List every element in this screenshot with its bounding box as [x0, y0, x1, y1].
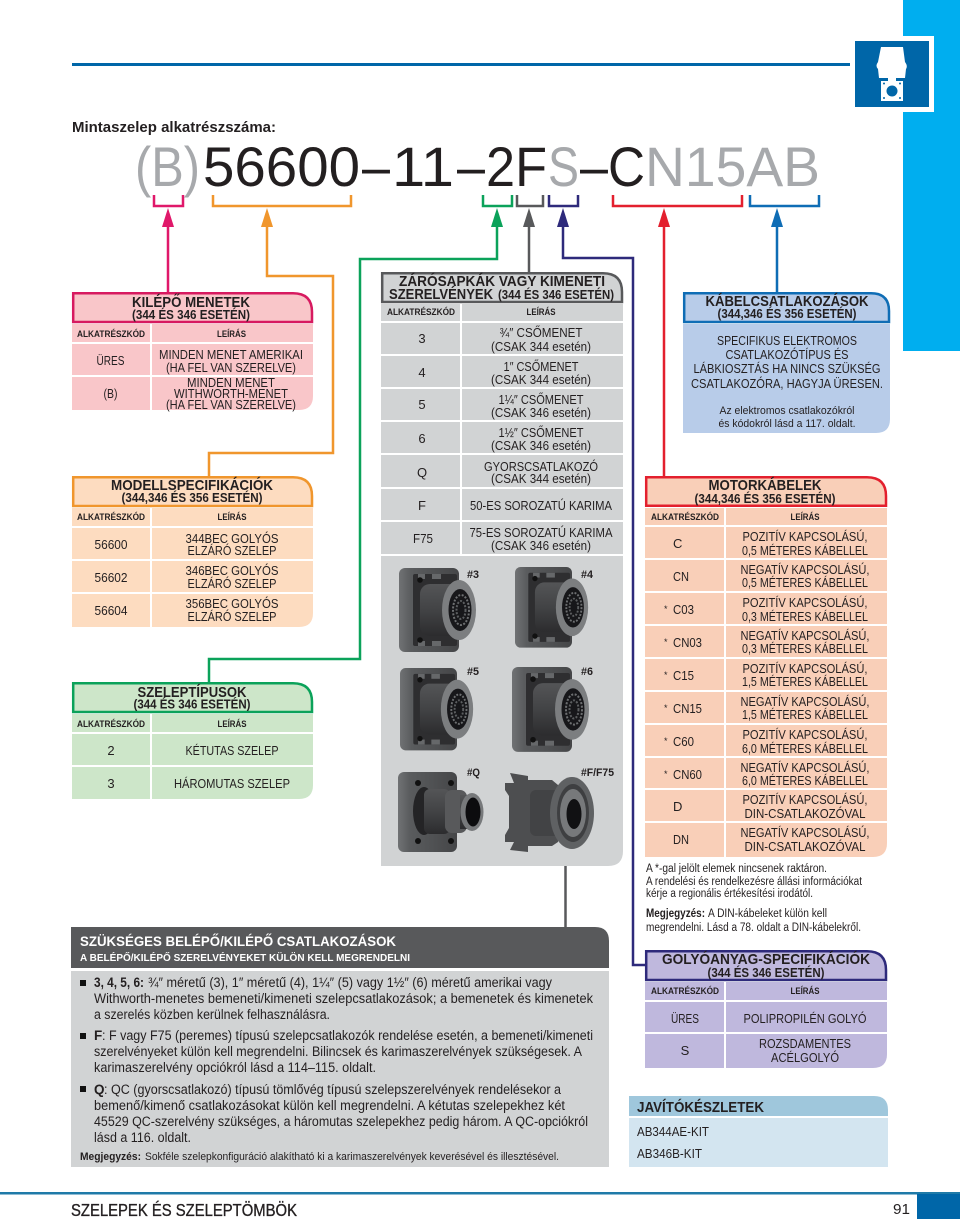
bullet: F: karimaszerelvény opciókról lásd a 114–115. oldalt. — [94, 1060, 376, 1075]
row: 2 — [72, 734, 313, 765]
connector: blue — [750, 195, 819, 292]
row: 56604: 56604 — [94, 603, 128, 618]
row: 56600: 56600 — [94, 537, 128, 552]
part number: (B) — [135, 135, 200, 198]
heading: SZELEPTÍPUSOK — [138, 684, 247, 701]
panel: model specifications — [72, 476, 313, 627]
row: CN60: 6,0 MÉTERES KÁBELLEL — [742, 773, 868, 788]
row: CN60: NEGATÍV KAPCSOLÁSÚ, — [740, 760, 870, 775]
row: F75: (CSAK 346 esetén) — [491, 538, 591, 553]
row: CN03: * — [664, 637, 668, 647]
part number: – — [457, 135, 486, 198]
row: CN15: NEGATÍV KAPCSOLÁSÚ, — [740, 694, 870, 709]
fitting #5 — [400, 666, 479, 750]
footnote: stock note: A *-gal jelölt elemek nincsenek raktáron. — [646, 863, 827, 875]
description text: SPECIFIKUS ELEKTROMOS — [717, 333, 857, 348]
row: 56604 — [72, 594, 313, 627]
row: CN15: CN15 — [673, 701, 702, 716]
panel: end caps and outlet fittings — [381, 272, 623, 866]
footer page block — [917, 1194, 960, 1219]
page number: 91 — [893, 1201, 910, 1218]
row: 56600 — [72, 528, 313, 559]
footer rule — [0, 1192, 960, 1194]
bullet: 3, 4, 5, 6: a szerelés közben kerülnek felhasználásra. — [94, 1007, 330, 1022]
panel: valve types — [72, 683, 313, 799]
panel: outlet threads — [72, 293, 313, 412]
heading: (344,346 ÉS 356 ESETÉN) — [718, 306, 856, 321]
row: C60: POZITÍV KAPCSOLÁSÚ, — [742, 727, 868, 742]
column headers: ALKATRÉSZKÓD — [77, 328, 145, 339]
row: 2: 2 — [107, 743, 115, 758]
row: 3: (CSAK 344 esetén) — [491, 339, 591, 354]
bullet: Q: Q — [94, 1082, 105, 1097]
row: 56602: ELZÁRÓ SZELEP — [188, 576, 276, 591]
column headers: LEÍRÁS — [526, 307, 556, 317]
row: 5: (CSAK 346 esetén) — [491, 405, 591, 420]
row: C60: C60 — [673, 734, 694, 749]
row: ÜRES: MINDEN MENET AMERIKAI — [159, 347, 303, 362]
description text: és kódokról lásd a 117. oldalt. — [718, 418, 856, 430]
heading — [629, 1096, 888, 1116]
column headers: ALKATRÉSZKÓD — [77, 511, 145, 522]
row: 6: 1½″ CSŐMENET — [498, 425, 584, 440]
panel: ball material specifications — [645, 950, 887, 1068]
row: D — [645, 790, 887, 821]
heading: MODELLSPECIFIKÁCIÓK — [111, 476, 273, 494]
row: (B) — [72, 375, 313, 412]
row: C03: POZITÍV KAPCSOLÁSÚ, — [742, 595, 868, 610]
heading — [73, 476, 312, 506]
description text: CSATLAKOZÓTÍPUS ÉS — [726, 347, 849, 362]
row: ÜRES: ÜRES — [96, 353, 125, 368]
bullet: Q: bemenő/kimenő csatlakozásokat külön kell megrendelni. A kétutas szelepekhez két — [94, 1098, 565, 1113]
bullet: Q: 45529 QC-szerelvény szükséges, a háromutas szelepekhez pedig három. A QC-opciókról — [94, 1114, 588, 1129]
row: Q: (CSAK 344 esetén) — [491, 471, 591, 486]
row: C03: 0,3 MÉTERES KÁBELLEL — [742, 609, 868, 624]
heading — [73, 683, 312, 712]
row: C60: 6,0 MÉTERES KÁBELLEL — [742, 741, 868, 756]
footnote: stock note: kérje a regionális értékesítési irodától. — [646, 888, 813, 900]
row: DN: NEGATÍV KAPCSOLÁSÚ, — [740, 825, 870, 840]
description text — [683, 324, 890, 433]
heading — [73, 293, 312, 322]
fitting #F/F75: #F/F75 — [581, 767, 614, 779]
fitting #6: #6 — [581, 666, 593, 678]
part number: – — [362, 135, 391, 198]
connector: red — [613, 195, 742, 476]
bullet: Q: : QC (gyorscsatlakozó) típusú tömlővég típusú szelepszerelvények rendelésekor a — [104, 1082, 561, 1097]
kit list: AB344AE-KIT — [637, 1124, 709, 1139]
connector: purple — [549, 195, 647, 965]
heading: GOLYÓANYAG-SPECIFIKÁCIÓK — [662, 950, 870, 968]
column headers: ALKATRÉSZKÓD — [77, 718, 145, 729]
row: 4: 1″ CSŐMENET — [504, 359, 579, 374]
footnote: DIN cable note: Megjegyzés: — [646, 908, 705, 920]
row: Q — [381, 455, 623, 487]
fitting #3 — [399, 568, 479, 652]
row: F75 — [381, 522, 623, 554]
row: CN03: 0,3 MÉTERES KÁBELLEL — [742, 641, 868, 656]
row: CN03 — [645, 626, 887, 657]
heading: KILÉPŐ MENETEK — [132, 293, 250, 311]
row: 3 — [381, 323, 623, 354]
row: CN: NEGATÍV KAPCSOLÁSÚ, — [740, 562, 870, 577]
row: 6: (CSAK 346 esetén) — [491, 438, 591, 453]
row: CN15 — [645, 692, 887, 723]
heading: SZERELVÉNYEK — [389, 286, 493, 303]
row: ÜRES — [72, 344, 313, 375]
heading: A BELÉPŐ/KILÉPŐ SZERELVÉNYEKET KÜLÖN KELL MEGRENDELNI — [80, 951, 410, 964]
row: C15: POZITÍV KAPCSOLÁSÚ, — [742, 661, 868, 676]
row: 3: HÁROMUTAS SZELEP — [174, 776, 290, 791]
heading — [646, 950, 886, 980]
row: CN03: NEGATÍV KAPCSOLÁSÚ, — [740, 628, 870, 643]
bullet: 3, 4, 5, 6: ¾″ méretű (3), 1″ méretű (4), 1¼″ (5) vagy 1½″ (6) méretű amerikai vagy — [148, 975, 552, 990]
connector: pink — [154, 195, 183, 292]
bullet: F: : F vagy F75 (peremes) típusú szelepcsatlakozók rendelése esetén, a bemeneti/kimeneti — [102, 1028, 593, 1043]
row: S: ACÉLGOLYÓ — [771, 1050, 839, 1065]
row: F: 50-ES SOROZATÚ KARIMA — [470, 498, 612, 513]
row: D: D — [673, 799, 682, 814]
fitting #F/F75 — [505, 767, 614, 852]
heading: (344 ÉS 346 ESETÉN) — [134, 696, 250, 712]
row: 56602: 56602 — [94, 570, 128, 585]
row: CN60 — [645, 758, 887, 788]
kit list: AB346B-KIT — [637, 1146, 702, 1161]
bullet: F: szerelvényeket külön kell megrendelni. Bilincsek és karimaszerelvények szükségesek. A — [94, 1044, 582, 1059]
row: 56602: 346BEC GOLYÓS — [186, 563, 279, 578]
column headers: LEÍRÁS — [218, 719, 246, 729]
row: C15: C15 — [673, 668, 694, 683]
row: 4: 4 — [418, 365, 426, 380]
column headers — [72, 508, 313, 526]
part number: N15AB — [645, 135, 820, 198]
note: Sokféle szelepkonfiguráció alakítható ki a karimaszerelvények keverésével és illesztésével. — [145, 1151, 559, 1163]
row: S: S — [681, 1043, 690, 1058]
panel: cable connections — [683, 293, 890, 433]
row: D: POZITÍV KAPCSOLÁSÚ, — [742, 792, 868, 807]
row: C60: * — [664, 736, 668, 746]
part number: 2F — [486, 135, 547, 198]
row: 3: 3 — [418, 331, 426, 346]
bullet: 3, 4, 5, 6: Withworth-menetes bemeneti/kimeneti szelepcsatlakozások; a bemenetek és kimenetek — [94, 991, 593, 1006]
row: C03: * — [664, 604, 668, 614]
row: CN15: * — [664, 703, 668, 713]
footnote: stock note: A rendelési és rendelkezésre állási információkat — [646, 876, 863, 888]
panel: motor cables — [645, 477, 887, 857]
heading — [646, 477, 886, 506]
row: (B): (HA FEL VAN SZERELVE) — [166, 397, 296, 412]
row: 56600: 344BEC GOLYÓS — [186, 531, 279, 546]
heading: (344 ÉS 346 ESETÉN) — [498, 287, 614, 302]
row: C03: C03 — [673, 602, 694, 617]
row: DN: DN — [673, 832, 689, 847]
row: C60 — [645, 725, 887, 756]
heading: MOTORKÁBELEK — [708, 477, 822, 494]
heading: (344,346 ÉS 356 ESETÉN) — [694, 491, 836, 506]
column headers — [645, 508, 887, 525]
heading: KÁBELCSATLAKOZÁSOK — [706, 293, 869, 310]
panel: repair kits — [629, 1096, 888, 1167]
footnote: DIN cable note: megrendelni. Lásd a 78. oldalt a DIN-kábelekről. — [646, 922, 861, 934]
row: ÜRES — [645, 1002, 887, 1032]
column headers: ALKATRÉSZKÓD — [651, 985, 719, 996]
row: (B): (B) — [104, 386, 118, 401]
row: F: F — [418, 498, 426, 513]
note: Megjegyzés: — [80, 1151, 141, 1163]
row: F75: F75 — [413, 531, 433, 546]
description text: Az elektromos csatlakozókról — [720, 405, 854, 417]
row: 56604: 356BEC GOLYÓS — [186, 596, 279, 611]
column headers: ALKATRÉSZKÓD — [651, 511, 719, 522]
row: CN15: 1,5 MÉTERES KÁBELLEL — [742, 707, 868, 722]
row: Q: Q — [417, 465, 427, 480]
row: ÜRES: ÜRES — [671, 1011, 699, 1026]
row: S — [645, 1034, 887, 1068]
row: 6: 6 — [418, 431, 426, 446]
row: 56604: ELZÁRÓ SZELEP — [188, 609, 276, 624]
connector: gray — [517, 195, 566, 927]
part number: – — [580, 135, 609, 198]
row: C: C — [673, 536, 682, 551]
column headers: ALKATRÉSZKÓD — [387, 306, 455, 317]
part number: S — [548, 135, 579, 198]
heading: ZÁRÓSAPKÁK VAGY KIMENETI — [399, 272, 605, 290]
row: C15: * — [664, 670, 668, 680]
footnote: DIN cable note: A DIN-kábeleket külön kell — [708, 908, 827, 920]
blue side band — [903, 0, 960, 351]
row: 5 — [381, 389, 623, 420]
row: DN: DIN-CSATLAKOZÓVAL — [744, 839, 866, 854]
footnote: DIN cable note — [646, 908, 861, 934]
row: (B): WITHWORTH-MENET — [174, 386, 288, 401]
column headers — [72, 714, 313, 732]
bullet: 3, 4, 5, 6 — [80, 975, 593, 1022]
part number: 56600 — [203, 135, 360, 198]
fitting #3: #3 — [467, 569, 479, 581]
heading — [684, 293, 889, 322]
description text: CSATLAKOZÓRA, HAGYJA ÜRESEN. — [691, 376, 883, 391]
heading: (344 ÉS 346 ESETÉN) — [132, 307, 250, 322]
heading: (344 ÉS 346 ESETÉN) — [708, 965, 824, 980]
heading: SZÜKSÉGES BELÉPŐ/KILÉPŐ CSATLAKOZÁSOK — [80, 932, 396, 949]
row: C15 — [645, 659, 887, 690]
heading: JAVÍTÓKÉSZLETEK — [637, 1098, 764, 1116]
row: (B): MINDEN MENET — [187, 375, 275, 390]
row: 3 — [72, 767, 313, 799]
row: Q: GYORSCSATLAKOZÓ — [484, 459, 598, 474]
row: C: 0,5 MÉTERES KÁBELLEL — [742, 543, 868, 558]
row: CN60: CN60 — [673, 767, 702, 782]
row: 3: 3 — [107, 776, 115, 791]
part number: C — [608, 135, 645, 198]
bullet: F — [80, 1028, 593, 1075]
description text: LÁBKIOSZTÁS HA NINCS SZÜKSÉG — [694, 361, 880, 376]
footnote: stock note — [646, 863, 863, 900]
part number — [135, 135, 820, 198]
row: 4: (CSAK 344 esetén) — [491, 372, 591, 387]
column headers: LEÍRÁS — [217, 329, 246, 339]
row: F75: 75-ES SOROZATÚ KARIMA — [470, 525, 613, 540]
column headers: LEÍRÁS — [790, 986, 820, 996]
body background — [71, 971, 609, 1167]
row: CN60: * — [664, 769, 668, 779]
row: CN — [645, 560, 887, 591]
row: 5: 5 — [418, 397, 426, 412]
connector: orange — [209, 195, 351, 476]
fitting #4: #4 — [581, 569, 594, 581]
heading — [382, 272, 622, 303]
fitting #Q — [398, 767, 484, 852]
heading — [71, 927, 609, 968]
row: 6 — [381, 422, 623, 453]
row: 4 — [381, 356, 623, 387]
bullet: F: F — [94, 1028, 102, 1043]
top rule — [72, 63, 850, 66]
footer title: SZELEPEK ÉS SZELEPTÖMBÖK — [71, 1200, 297, 1220]
row: 3: ¾″ CSŐMENET — [500, 325, 583, 340]
heading: sample part number: Mintaszelep alkatrészszáma: — [72, 119, 276, 136]
row: 56600: ELZÁRÓ SZELEP — [188, 543, 276, 558]
row: C: POZITÍV KAPCSOLÁSÚ, — [742, 529, 868, 544]
row: D: DIN-CSATLAKOZÓVAL — [744, 806, 866, 821]
row: C — [645, 527, 887, 558]
bullet: 3, 4, 5, 6: 3, 4, 5, 6: — [94, 975, 144, 990]
row: 56602 — [72, 561, 313, 592]
column headers — [72, 324, 313, 342]
row: CN: CN — [673, 569, 689, 584]
photo area background — [381, 556, 623, 866]
part number: 11 — [392, 135, 454, 198]
heading: (344,346 ÉS 356 ESETÉN) — [122, 490, 262, 505]
row: ÜRES: POLIPROPILÉN GOLYÓ — [744, 1011, 866, 1026]
row: C03 — [645, 593, 887, 624]
row: 2: KÉTUTAS SZELEP — [186, 743, 278, 758]
row: C15: 1,5 MÉTERES KÁBELLEL — [742, 674, 868, 689]
row: S: ROZSDAMENTES — [759, 1036, 851, 1051]
row: F — [381, 489, 623, 520]
panel: required inlet/outlet connections — [71, 927, 609, 1167]
column headers: LEÍRÁS — [218, 512, 246, 522]
row: CN: 0,5 MÉTERES KÁBELLEL — [742, 575, 868, 590]
kit list — [629, 1118, 888, 1167]
fitting #4 — [515, 567, 594, 648]
fitting #5: #5 — [467, 666, 479, 678]
row: CN03: CN03 — [673, 635, 702, 650]
fitting #Q: #Q — [467, 767, 480, 779]
column headers — [645, 982, 887, 1000]
column headers — [381, 304, 623, 321]
row: DN — [645, 823, 887, 857]
fitting #6 — [512, 666, 593, 752]
connector: green — [209, 195, 512, 682]
icon: valve — [851, 36, 934, 112]
column headers: LEÍRÁS — [790, 512, 820, 522]
bullet: Q: lásd a 116. oldalt. — [94, 1130, 191, 1145]
bullet: Q — [80, 1082, 588, 1145]
row: 5: 1¼″ CSŐMENET — [498, 392, 584, 407]
row: ÜRES: (HA FEL VAN SZERELVE) — [166, 360, 296, 375]
